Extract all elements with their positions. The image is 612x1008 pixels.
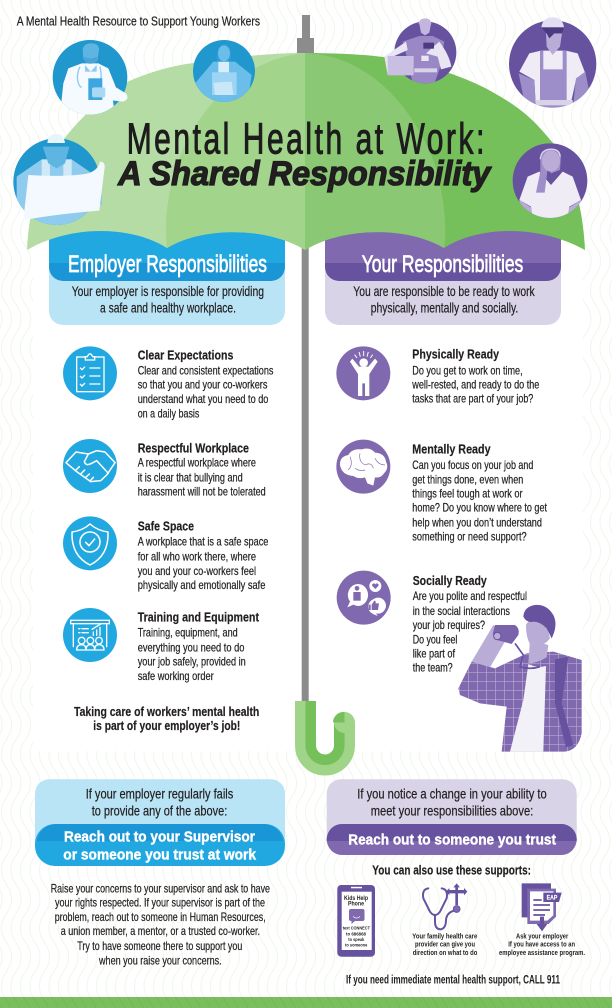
text: training and equipment: Training, equipment, and xyxy=(138,626,238,640)
text: safe space: A workplace that is a safe space xyxy=(138,535,269,549)
title: Mental Health at Work: xyxy=(127,114,484,163)
icon: social speech bubbles xyxy=(337,571,391,625)
text: raise your concerns: Raise your concerns to your supervisor and ask to have xyxy=(51,881,270,895)
text: clear expectations xyxy=(138,347,273,420)
umbrella canopy xyxy=(27,53,585,250)
icon: shield xyxy=(63,516,117,570)
icon: kids help phone: to 686868 xyxy=(346,931,366,936)
text: respectful workplace: A respectful workplace where xyxy=(138,456,256,470)
text: raise your concerns: Try to have someone there to support you xyxy=(77,939,242,953)
icon: clipboard xyxy=(63,346,117,400)
panel: employer fails: Reach out to your Supervisor xyxy=(64,829,255,846)
text: physically ready xyxy=(412,346,540,406)
text: safe space: physically and emotionally safe xyxy=(138,578,266,592)
callout: employer job xyxy=(74,704,259,733)
panel: employer fails: to provide any of the above: xyxy=(92,803,227,819)
icon: training board xyxy=(63,608,117,662)
icon: handshake xyxy=(63,439,117,493)
text: socially ready: the team? xyxy=(413,661,453,675)
text: safe space: you and your co-workers feel xyxy=(138,564,256,578)
text: raise your concerns: your rights respected. If your supervisor is part of the xyxy=(55,896,265,910)
text: clear expectations: Clear and consistent expectations xyxy=(138,363,273,377)
text: EAP note: employee assistance program. xyxy=(499,948,585,957)
text: safe space: for all who work there, where xyxy=(138,550,256,564)
avatar: call centre worker with headset xyxy=(513,143,587,220)
subtitle: A Mental Health Resource to Support Young Workers xyxy=(17,13,260,28)
text: mentally ready: get things done, even when xyxy=(412,472,523,486)
text: socially ready: in the social interactions xyxy=(413,604,510,618)
text: EAP note: Ask your employer xyxy=(516,931,568,940)
heading: supports: You can also use these supports: xyxy=(372,862,531,877)
avatar: teacher xyxy=(193,40,255,103)
icon: brain xyxy=(336,440,390,494)
icon: kids help phone: to someone xyxy=(345,943,368,948)
text: training and equipment: Training and Equipment xyxy=(138,610,260,625)
text: respectful workplace: Respectful Workplace xyxy=(138,441,249,456)
bottom green bar xyxy=(0,997,612,1008)
text: mentally ready: help when you don’t understand xyxy=(412,516,542,530)
panel: employer responsibilities header xyxy=(49,222,285,325)
text: family health care: provider can give you xyxy=(415,940,475,949)
text: mentally ready: things feel tough at work or xyxy=(412,487,523,501)
icon: kids help phone: Kids Help xyxy=(344,895,368,902)
text: socially ready: like part of xyxy=(413,647,456,661)
umbrella handle xyxy=(306,701,355,765)
illustration: photographer xyxy=(458,605,582,752)
text: socially ready: Socially Ready xyxy=(413,573,487,588)
text: physically ready: well-rested, and ready to do the xyxy=(412,378,540,392)
text: safe space xyxy=(138,519,269,592)
avatar: construction worker with plans xyxy=(13,134,105,227)
text: clear expectations: understand what you need to do xyxy=(138,392,269,406)
text: socially ready: your job requires? xyxy=(413,618,485,632)
text: training and equipment xyxy=(138,610,260,683)
text: respectful workplace: it is clear that bullying and xyxy=(138,471,243,485)
text: mentally ready: home? Do you know where to get xyxy=(412,501,547,515)
text: EAP note xyxy=(499,931,585,957)
text: training and equipment: everything you need to do xyxy=(138,641,245,655)
title: A Shared Responsibility xyxy=(117,155,492,193)
text: raise your concerns xyxy=(51,881,270,967)
white content area xyxy=(33,200,583,751)
avatar: delivery worker xyxy=(384,18,456,83)
icon: kids help phone: to speak xyxy=(348,937,365,942)
text: family health care: Your family health care xyxy=(412,931,477,940)
panel: change in ability xyxy=(327,779,577,855)
title xyxy=(117,114,492,193)
text: family health care xyxy=(412,931,478,957)
icon: physically ready person xyxy=(336,346,390,400)
text: mentally ready xyxy=(412,441,547,544)
text: socially ready: Do you feel xyxy=(413,632,457,646)
avatar: worker in overalls xyxy=(509,17,596,110)
text: physically ready: Physically Ready xyxy=(412,346,500,361)
panel: employer responsibilities header: Employer Responsibilities xyxy=(68,251,267,278)
text: respectful workplace xyxy=(138,441,266,499)
icon: EAP documents: EAP xyxy=(547,896,557,902)
icon: stethoscope xyxy=(423,883,467,929)
text: socially ready: Are you polite and respectful xyxy=(413,589,527,603)
text: mentally ready: Mentally Ready xyxy=(412,441,491,456)
panel: employer items xyxy=(63,346,117,400)
panel: change in ability: Reach out to someone you trust xyxy=(348,831,556,848)
text: clear expectations: so that you and your co-workers xyxy=(138,377,267,391)
text: clear expectations: Clear Expectations xyxy=(138,347,233,362)
text: EAP note: If you have access to an xyxy=(508,940,575,949)
text: respectful workplace: harassment will not be tolerated xyxy=(138,485,266,499)
text: raise your concerns: a union member, a mentor, or a trusted co-worker. xyxy=(61,924,260,938)
icon: kids help phone: text CONNECT xyxy=(343,925,370,930)
avatar: doctor xyxy=(53,40,127,115)
umbrella pole xyxy=(297,15,314,703)
panel: your responsibilities header: Your Responsibilities xyxy=(362,251,523,278)
icon: EAP documents xyxy=(522,883,562,931)
panel: employer fails: or someone you trust at work xyxy=(63,846,257,863)
panel: employer responsibilities header: Your employer is responsible for providing xyxy=(72,283,264,299)
panel: employer fails: If your employer regularly fails xyxy=(86,785,233,801)
text: family health care: direction on what to do xyxy=(413,948,478,957)
text: socially ready xyxy=(413,573,527,675)
panel: your responsibilities header: physically, mentally and socially. xyxy=(371,300,518,316)
text: raise your concerns: when you raise your concerns. xyxy=(98,953,222,967)
panel: your responsibilities header xyxy=(325,222,561,325)
icon: kids help phone: Phone xyxy=(348,901,364,908)
text: mentally ready: something or need support? xyxy=(412,530,527,544)
panel: change in ability: meet your responsibilities above: xyxy=(371,803,533,819)
panel: change in ability: If you notice a change in your ability to xyxy=(357,785,547,801)
panel: employer responsibilities header: a safe and healthy workplace. xyxy=(100,300,236,316)
icon: kids help phone xyxy=(337,885,375,957)
panel: your responsibilities header: You are responsible to be ready to work xyxy=(353,283,535,299)
panel: employer fails xyxy=(35,779,285,866)
text: raise your concerns: problem, reach out to someone in Human Resources, xyxy=(55,910,266,924)
text: training and equipment: safe working order xyxy=(138,669,214,683)
text: physically ready: tasks that are part of your job? xyxy=(412,392,534,406)
callout: employer job: Taking care of workers’ mental health xyxy=(74,704,259,719)
callout: employer job: is part of your employer’s job! xyxy=(93,718,240,733)
text: training and equipment: your job safely, provided in xyxy=(138,655,246,669)
text: safe space: Safe Space xyxy=(138,519,194,534)
text: mentally ready: Can you focus on your job and xyxy=(412,458,533,472)
text: clear expectations: on a daily basis xyxy=(138,406,199,420)
text: physically ready: Do you get to work on time, xyxy=(412,363,523,377)
